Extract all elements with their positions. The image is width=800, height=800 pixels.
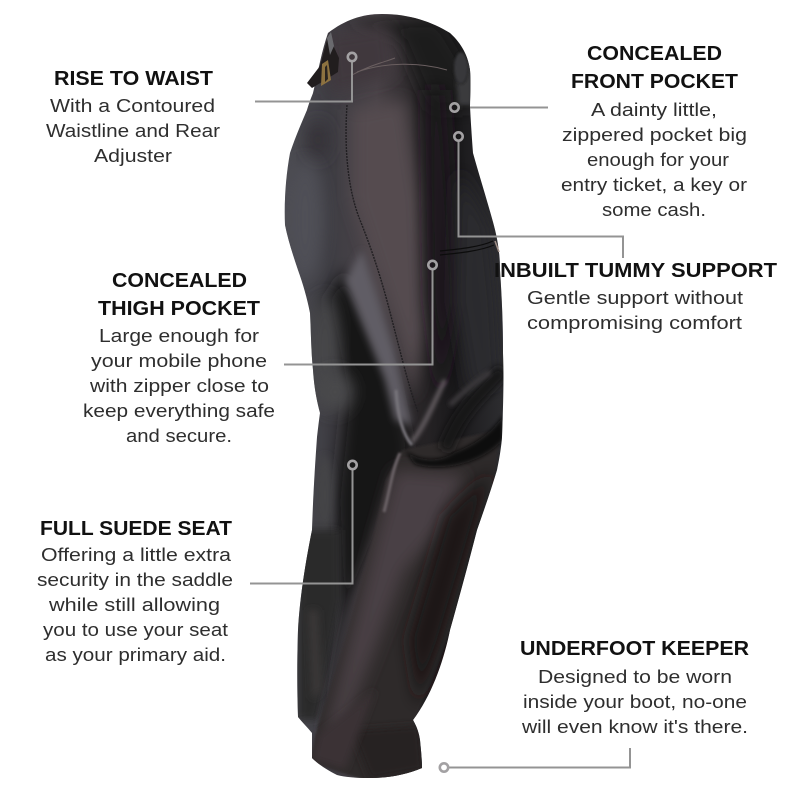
- knee folds: [384, 370, 503, 512]
- text: thigh pocket description: your mobile phone: [91, 351, 267, 371]
- text: thigh pocket description: Large enough for: [99, 326, 259, 346]
- text: suede seat description: Offering a little extra: [41, 545, 232, 565]
- text: underfoot keeper description: Designed to be worn: [538, 667, 732, 687]
- text: tummy support description: compromising comfort: [527, 313, 742, 333]
- ring marker: front pocket: [450, 103, 459, 112]
- text: suede seat description: as your primary aid.: [45, 645, 226, 665]
- text: rise to waist description: Waistline and Rear: [46, 121, 220, 141]
- text: front pocket description: enough for your: [587, 150, 729, 170]
- leader line: suede seat: [250, 470, 352, 584]
- callout: inbuilt tummy support: [454, 132, 777, 333]
- heading: concealed thigh pocket: THIGH POCKET: [98, 298, 260, 320]
- heading: concealed front pocket: FRONT POCKET: [571, 71, 738, 93]
- text: front pocket description: zippered pocket big: [562, 125, 747, 145]
- heading: inbuilt tummy support: INBUILT TUMMY SUPPORT: [494, 260, 777, 282]
- lower leg light and dark areas: [312, 470, 492, 780]
- back leg shading: [287, 120, 412, 725]
- text: thigh pocket description: with zipper close to: [89, 376, 269, 396]
- callout: concealed front pocket: [450, 43, 747, 220]
- callout: concealed thigh pocket: [83, 261, 437, 446]
- callout: full suede seat: [37, 461, 357, 665]
- text: thigh pocket description: keep everything safe: [83, 401, 275, 421]
- pocket and zip: [440, 241, 494, 255]
- text: underfoot keeper description: [521, 667, 748, 737]
- ring marker: tummy support: [454, 132, 463, 141]
- rear adjuster buckle: [307, 32, 339, 88]
- waistband seam: [352, 58, 447, 75]
- waist adjuster patch: [454, 52, 468, 84]
- text: rise to waist description: Adjuster: [94, 146, 172, 166]
- text: thigh pocket description: [83, 326, 275, 446]
- heading: concealed thigh pocket: [98, 270, 260, 320]
- text: tummy support description: Gentle support without: [527, 288, 743, 308]
- heading: full suede seat: FULL SUEDE SEAT: [40, 518, 232, 540]
- leader line: underfoot keeper: [449, 748, 630, 768]
- text: underfoot keeper description: will even know it's there.: [521, 717, 748, 737]
- thigh panel highlight: [345, 90, 503, 425]
- text: rise to waist description: With a Contoured: [50, 96, 215, 116]
- waistband shading: [325, 20, 472, 110]
- text: front pocket description: [561, 100, 747, 220]
- text: front pocket description: A dainty little,: [591, 100, 717, 120]
- text: suede seat description: security in the saddle: [37, 570, 233, 590]
- text: front pocket description: some cash.: [602, 200, 706, 220]
- ring marker: thigh pocket: [428, 261, 437, 269]
- heading: concealed thigh pocket: CONCEALED: [112, 270, 247, 292]
- lower front leg: [310, 430, 500, 782]
- text: suede seat description: [37, 545, 233, 665]
- heading: rise to waist: RISE TO WAIST: [54, 68, 213, 90]
- text: underfoot keeper description: inside your boot, no-one: [523, 692, 747, 712]
- leader line: front pocket: [470, 106, 548, 108]
- text: tummy support description: [527, 288, 743, 333]
- side seam: [346, 105, 418, 412]
- heading: concealed front pocket: [571, 43, 738, 93]
- ring marker: rise to waist: [348, 53, 356, 61]
- callout: rise to waist: [46, 53, 356, 166]
- heading: concealed front pocket: CONCEALED: [587, 43, 722, 65]
- trousers photo: [280, 10, 510, 785]
- ring marker: suede seat: [348, 461, 357, 469]
- text: rise to waist description: [46, 96, 220, 166]
- zip pull: [495, 241, 499, 252]
- callout: underfoot keeper: [440, 638, 750, 772]
- heading: underfoot keeper: UNDERFOOT KEEPER: [520, 638, 750, 660]
- text: thigh pocket description: and secure.: [126, 426, 232, 446]
- leader line: tummy support: [458, 141, 623, 258]
- text: suede seat description: you to use your seat: [43, 620, 228, 640]
- ring marker: underfoot keeper: [440, 763, 448, 772]
- text: front pocket description: entry ticket, a key or: [561, 175, 747, 195]
- leader line: rise to waist: [255, 62, 352, 102]
- text: suede seat description: while still allowing: [48, 595, 220, 615]
- leader line: thigh pocket: [284, 270, 432, 364]
